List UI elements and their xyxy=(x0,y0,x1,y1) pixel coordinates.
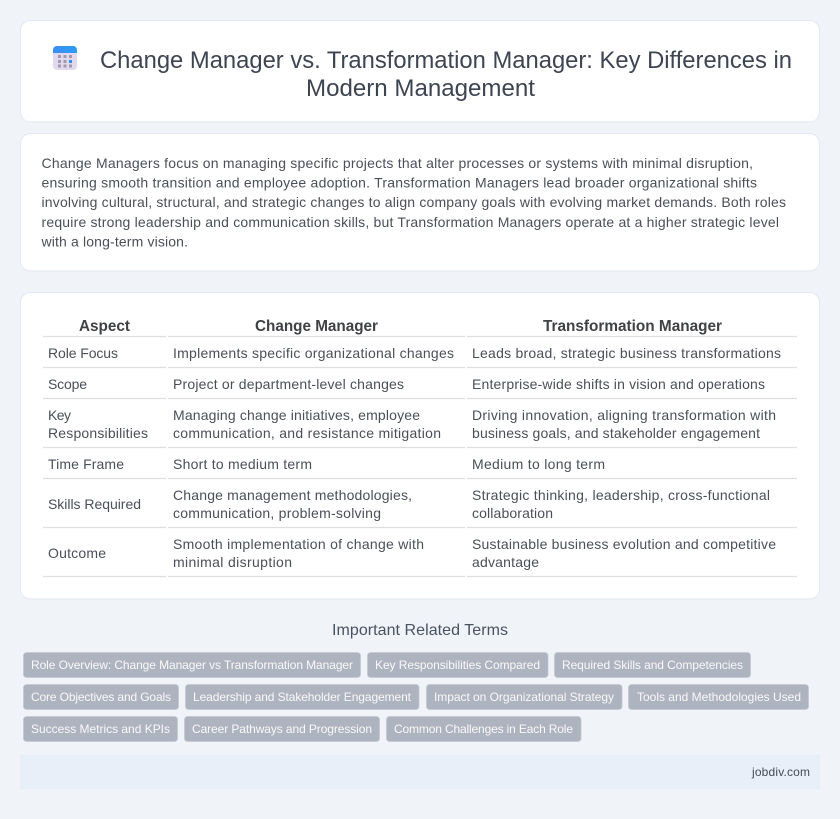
row: skills required: Strategic thinking, leadership, cross-functional xyxy=(472,487,770,503)
row: role focus xyxy=(48,345,781,361)
title: Change Manager vs. Transformation Manager: Key Differences in xyxy=(100,47,792,74)
related term tags: Common Challenges in Each Role xyxy=(394,722,573,736)
row: time frame: Time Frame xyxy=(48,456,124,472)
panel: description xyxy=(20,134,820,271)
related term tags: Core Objectives and Goals xyxy=(31,690,171,704)
footer source label: jobdiv.com xyxy=(751,765,810,779)
header panel xyxy=(20,20,820,122)
title: Modern Management xyxy=(306,75,535,102)
row: scope: Scope xyxy=(48,376,87,392)
row: outcome: minimal disruption xyxy=(173,554,292,570)
text block: summary paragraph: ensuring smooth transition and employee adoption. Transformation Managers lead broader organizational shifts xyxy=(42,175,757,191)
related term tags: Required Skills and Competencies xyxy=(562,658,743,672)
related term tags: Key Responsibilities Compared xyxy=(375,658,540,672)
table header: Transformation Manager xyxy=(543,318,722,335)
row: key responsibilities: communication, and resistance mitigation xyxy=(173,425,441,441)
row: outcome: Smooth implementation of change with xyxy=(173,536,424,552)
row: skills required: communication, problem-solving xyxy=(173,505,381,521)
related term tags: Leadership and Stakeholder Engagement xyxy=(193,690,412,704)
row: role focus: Implements specific organizational changes xyxy=(173,345,454,361)
row: outcome: Sustainable business evolution and competitive xyxy=(472,536,776,552)
related term tags: Impact on Organizational Strategy xyxy=(434,690,614,704)
related term tags xyxy=(24,652,808,742)
table header xyxy=(79,318,722,335)
heading: related terms: Important Related Terms xyxy=(332,622,508,639)
row: time frame xyxy=(48,456,605,472)
row: outcome: advantage xyxy=(472,554,539,570)
row: scope: Project or department-level changes xyxy=(173,376,404,392)
row: key responsibilities xyxy=(48,407,776,441)
table header: Change Manager xyxy=(255,318,378,335)
footer bar xyxy=(20,755,820,789)
related term tags: Tools and Methodologies Used xyxy=(637,690,801,704)
row: key responsibilities: Key xyxy=(48,407,71,423)
row: time frame: Medium to long term xyxy=(472,456,605,472)
row: key responsibilities: Driving innovation, aligning transformation with xyxy=(472,407,776,423)
text block: summary paragraph: require strong leadership and communication skills, but Transformation Managers operate at a higher strategic level xyxy=(42,214,779,230)
row: key responsibilities: Responsibilities xyxy=(48,425,148,441)
row: scope: Enterprise-wide shifts in vision and operations xyxy=(472,376,765,392)
text block: summary paragraph: involving cultural, structural, and strategic changes to align company goals with evolving market demands. Both roles xyxy=(42,194,786,210)
row: outcome: Outcome xyxy=(48,545,106,561)
row: role focus: Leads broad, strategic business transformations xyxy=(472,345,781,361)
row: outcome xyxy=(48,536,776,570)
row: key responsibilities: business goals, and stakeholder engagement xyxy=(472,425,760,441)
text block: summary paragraph: Change Managers focus on managing specific projects that alter processes or systems with minimal disruption, xyxy=(42,155,753,171)
row: key responsibilities: Managing change initiatives, employee xyxy=(173,407,420,423)
row: skills required: Change management methodologies, xyxy=(173,487,412,503)
panel: comparison table xyxy=(20,292,820,599)
icon: calendar xyxy=(53,46,77,70)
title xyxy=(100,47,792,102)
related term tags: Role Overview: Change Manager vs Transformation Manager xyxy=(31,658,353,672)
row: time frame: Short to medium term xyxy=(173,456,312,472)
row: scope xyxy=(48,376,765,392)
row: skills required: Skills Required xyxy=(48,496,141,512)
related term tags: Career Pathways and Progression xyxy=(192,722,372,736)
row: skills required: collaboration xyxy=(472,505,553,521)
text block: summary paragraph xyxy=(40,155,786,249)
table header: Aspect xyxy=(79,318,131,335)
row: role focus: Role Focus xyxy=(48,345,118,361)
row: skills required xyxy=(48,487,770,521)
text block: summary paragraph: with a long-term vision. xyxy=(40,233,188,249)
related term tags: Success Metrics and KPIs xyxy=(31,722,170,736)
